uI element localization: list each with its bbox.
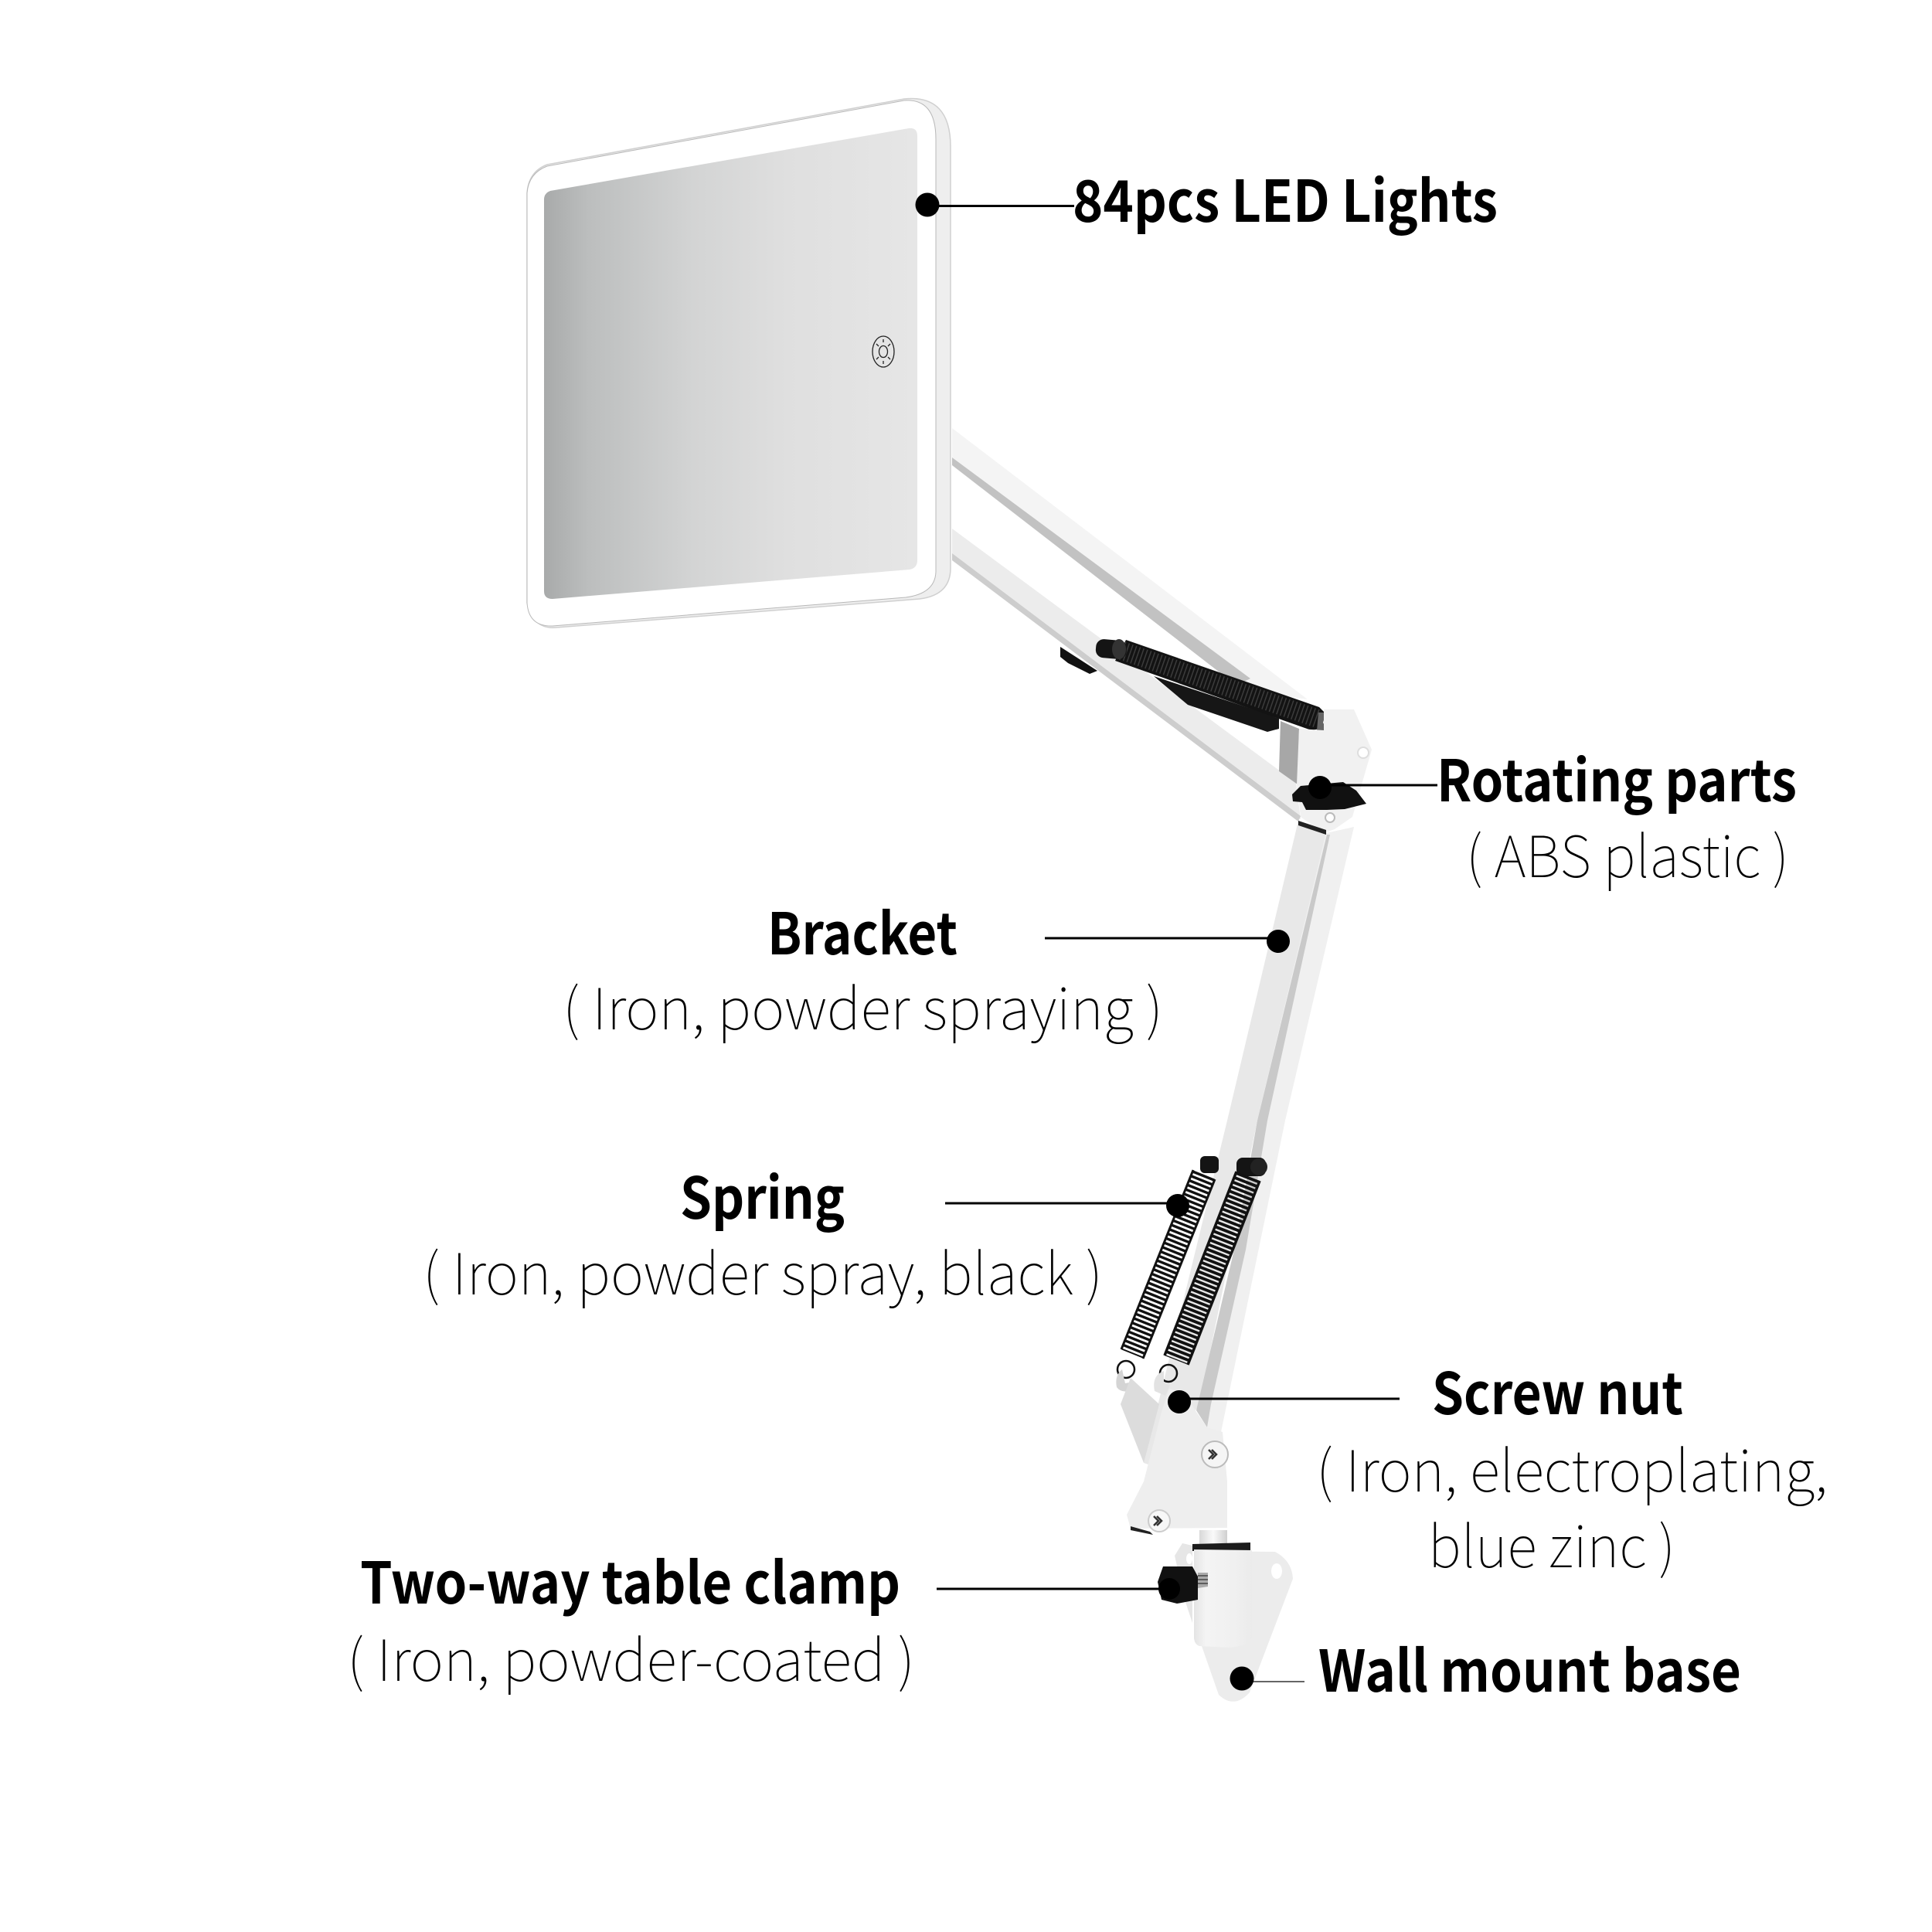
icon: touch button — [872, 336, 894, 367]
upper spring assembly — [1060, 638, 1328, 732]
callout: LED lights: 84pcs LED Lights — [1073, 156, 1498, 239]
lower springs — [1117, 1156, 1267, 1382]
callout: spring: Spring — [680, 1153, 845, 1236]
rotating knob — [1292, 782, 1366, 810]
lower arm — [1144, 821, 1354, 1468]
callout: rotating parts: ( ABS plastic ) — [1466, 811, 1789, 894]
product: mirror on swing arm — [527, 99, 1372, 1702]
callout: screw nut: blue zinc ) — [1428, 1502, 1675, 1584]
mirror body — [527, 99, 951, 628]
callout: table clamp — [347, 1538, 1180, 1698]
callout: wall mount base: Wall mount base — [1318, 1626, 1741, 1709]
callout: screw nut: ( Iron, electroplating, — [1316, 1426, 1828, 1509]
knob — [1158, 1566, 1198, 1604]
callout: bracket: Bracket — [767, 889, 957, 971]
callout: bracket — [563, 889, 1290, 1046]
callout: rotating parts: Rotating parts — [1437, 736, 1797, 818]
callout: table clamp: ( Iron, powder-coated ) — [347, 1615, 915, 1698]
callout: bracket: ( Iron, powder spraying ) — [563, 964, 1163, 1046]
wall mount base — [1158, 1530, 1293, 1702]
callout: screw nut: Screw nut — [1432, 1349, 1683, 1431]
lower bracket — [1116, 1369, 1228, 1535]
callout: spring — [423, 1153, 1189, 1311]
upper arm — [952, 428, 1308, 821]
callout: spring: ( Iron, powder spray, black ) — [423, 1229, 1103, 1311]
callout: rotating parts — [1308, 736, 1797, 894]
mirror glass — [544, 128, 917, 599]
callout: LED lights — [915, 156, 1498, 239]
callout: table clamp: Two-way table clamp — [360, 1538, 900, 1621]
joint plate — [1279, 709, 1372, 833]
callout: screw nut — [1168, 1349, 1828, 1584]
